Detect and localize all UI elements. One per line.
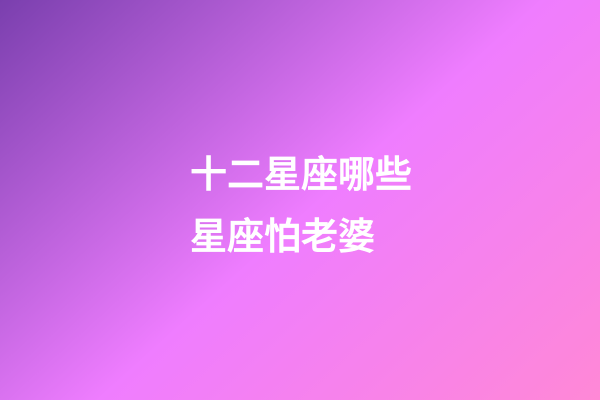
title line 2: 星座怕老婆 <box>190 216 375 257</box>
title line 1: 十二星座哪些 <box>190 154 412 195</box>
title block <box>190 154 412 257</box>
